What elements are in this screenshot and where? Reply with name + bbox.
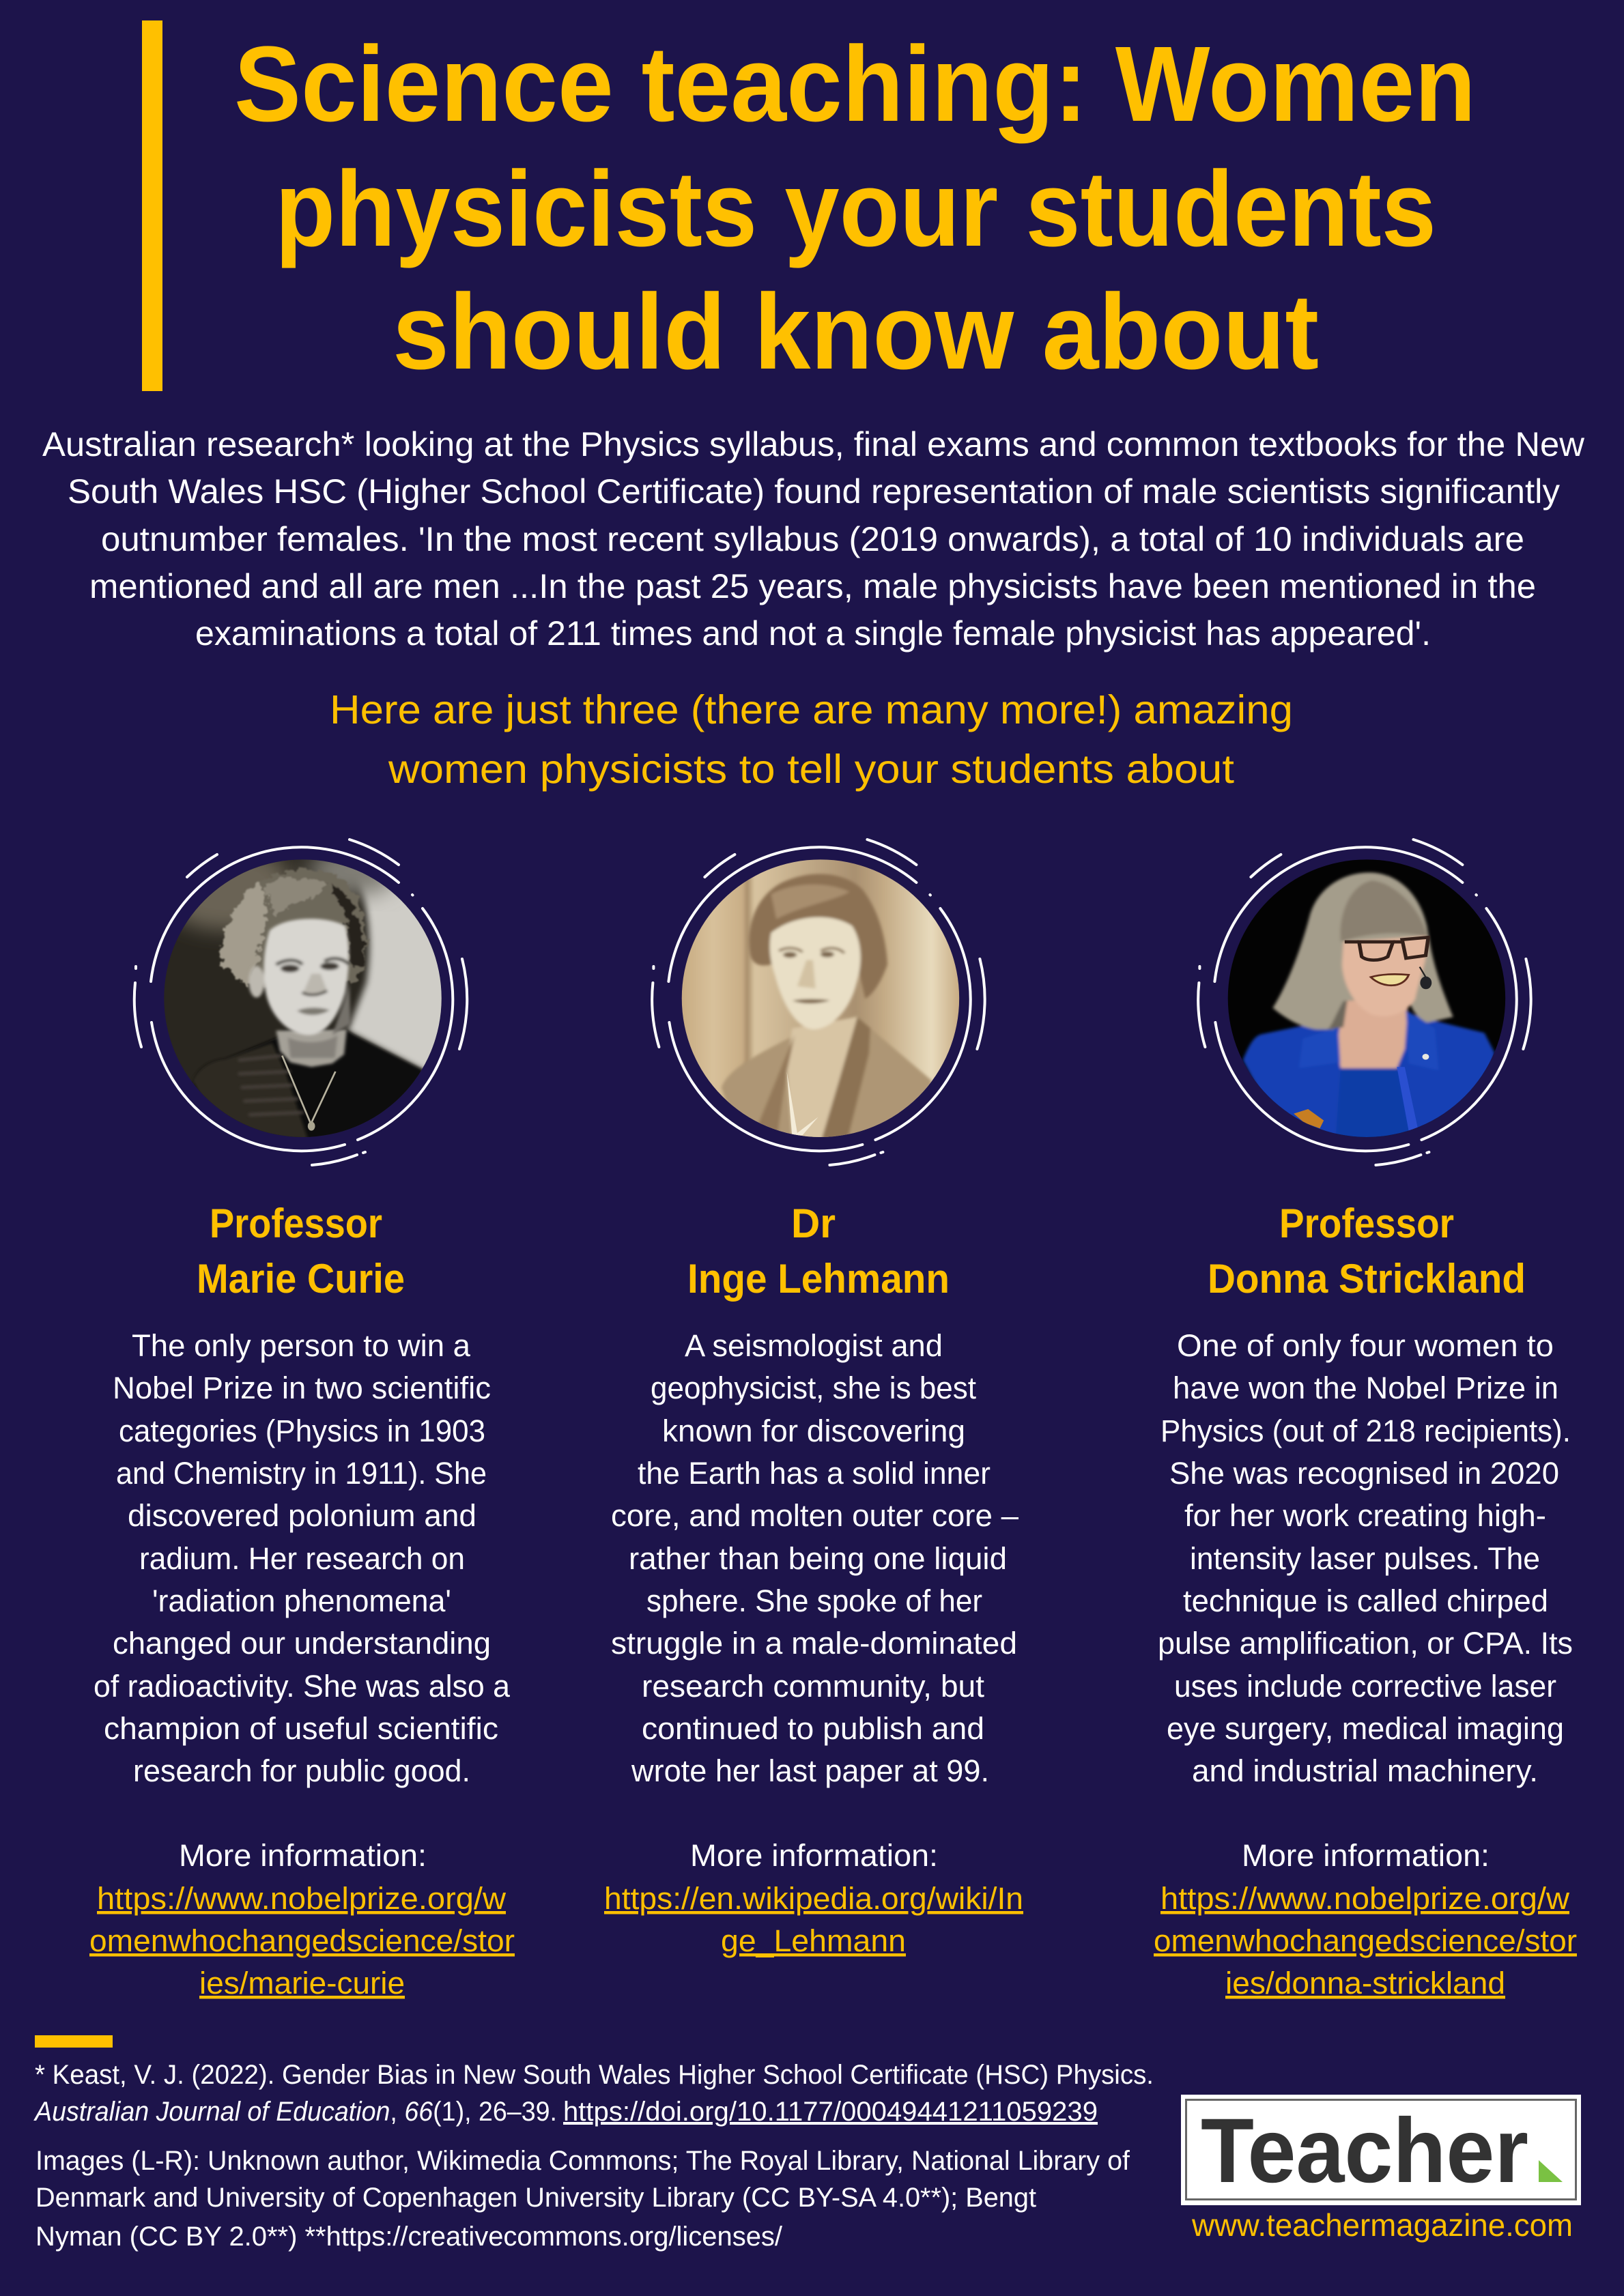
biography: Inge Lehmann: A seismologist and xyxy=(685,1328,943,1363)
intro paragraph xyxy=(42,425,1585,652)
biography: Inge Lehmann: the Earth has a solid inner xyxy=(638,1456,991,1491)
biography: Donna Strickland: eye surgery, medical imaging xyxy=(1167,1711,1564,1746)
biography: Marie Curie: 'radiation phenomena' xyxy=(152,1583,451,1618)
biography: Donna Strickland: for her work creating high- xyxy=(1184,1498,1546,1533)
portrait: Marie Curie xyxy=(134,840,467,1165)
biography: Marie Curie: and Chemistry in 1911). She xyxy=(116,1456,487,1491)
biography: Inge Lehmann: continued to publish and xyxy=(642,1711,984,1746)
panel: Marie Curie xyxy=(89,1201,515,2000)
portrait: Inge Lehmann xyxy=(652,840,985,1165)
intro paragraph: South Wales HSC (Higher School Certificate) found representation of male scientists significantly xyxy=(68,472,1560,511)
intro paragraph: outnumber females. 'In the most recent syllabus (2019 onwards), a total of 10 individuals are xyxy=(101,520,1524,558)
subheading: Here are just three (there are many more!) amazing xyxy=(330,687,1293,732)
subheading: women physicists to tell your students about xyxy=(388,747,1234,792)
biography: Donna Strickland: She was recognised in 2020 xyxy=(1169,1456,1559,1491)
more information: Inge Lehmann: https://en.wikipedia.org/wiki/In xyxy=(604,1881,1023,1916)
name: Inge Lehmann: Inge Lehmann xyxy=(687,1256,950,1302)
biography: Donna Strickland: Physics (out of 218 recipients). xyxy=(1160,1414,1571,1448)
name: Donna Strickland xyxy=(1208,1201,1526,1302)
more information: Donna Strickland xyxy=(1154,1838,1577,2000)
reference citation: * Keast, V. J. (2022). Gender Bias in New South Wales Higher School Certificate (HSC) Physics. xyxy=(35,2060,1154,2090)
intro paragraph: mentioned and all are men ...In the past 25 years, male physicists have been mentioned in the xyxy=(89,567,1536,605)
more information: Marie Curie: https://www.nobelprize.org/w xyxy=(97,1881,507,1916)
portrait: Donna Strickland xyxy=(1198,840,1531,1165)
biography: Marie Curie: research for public good. xyxy=(133,1753,470,1788)
name: Donna Strickland: Donna Strickland xyxy=(1208,1256,1526,1302)
biography: Donna Strickland: pulse amplification, or CPA. Its xyxy=(1158,1626,1573,1661)
image credits xyxy=(35,2146,1130,2252)
biography: Marie Curie: Nobel Prize in two scientific xyxy=(113,1371,491,1405)
title: physicists your students xyxy=(275,149,1436,269)
biography: Marie Curie: discovered polonium and xyxy=(128,1498,476,1533)
biography: Marie Curie: The only person to win a xyxy=(132,1328,471,1363)
more information: Marie Curie xyxy=(89,1838,515,2000)
biography: Inge Lehmann: geophysicist, she is best xyxy=(651,1371,976,1405)
biography: Donna Strickland: have won the Nobel Prize in xyxy=(1173,1371,1558,1405)
biography: Marie Curie: of radioactivity. She was also a xyxy=(94,1669,511,1704)
biography: Donna Strickland: and industrial machinery. xyxy=(1192,1753,1538,1788)
more information: Marie Curie: More information: xyxy=(179,1838,427,1873)
panel: Inge Lehmann xyxy=(604,1201,1023,1958)
name: Inge Lehmann xyxy=(687,1201,950,1302)
biography: Inge Lehmann: sphere. She spoke of her xyxy=(646,1583,982,1618)
name: Marie Curie xyxy=(197,1201,405,1302)
biography: Marie Curie: categories (Physics in 1903 xyxy=(119,1414,485,1448)
title: should know about xyxy=(393,272,1319,392)
logo: Teacher: Teacher xyxy=(1201,2100,1528,2202)
biography: Donna Strickland: One of only four women to xyxy=(1177,1328,1554,1363)
biography: Donna Strickland: technique is called chirped xyxy=(1183,1583,1548,1618)
biography: Marie Curie: changed our understanding xyxy=(113,1626,491,1661)
image credits: Denmark and University of Copenhagen University Library (CC BY-SA 4.0**); Bengt xyxy=(35,2183,1036,2213)
intro paragraph: Australian research* looking at the Physics syllabus, final exams and common textbooks for the New xyxy=(42,425,1585,463)
name: Marie Curie: Marie Curie xyxy=(197,1256,405,1302)
more information: Inge Lehmann: ge_Lehmann xyxy=(721,1923,906,1958)
biography: Marie Curie: radium. Her research on xyxy=(139,1541,465,1576)
reference citation: https://doi.org/10.1177/00049441211059239 xyxy=(563,2097,1098,2127)
more information: Inge Lehmann xyxy=(604,1838,1023,1958)
more information: Donna Strickland: omenwhochangedscience/stor xyxy=(1154,1923,1577,1958)
more information: Donna Strickland: https://www.nobelprize.org/w xyxy=(1160,1881,1570,1916)
biography: Donna Strickland xyxy=(1158,1328,1573,1788)
more information: Marie Curie: ies/marie-curie xyxy=(199,1966,405,2000)
biography: Inge Lehmann: research community, but xyxy=(642,1669,985,1704)
biography: Donna Strickland: intensity laser pulses. The xyxy=(1190,1541,1540,1576)
more information: Marie Curie: omenwhochangedscience/stor xyxy=(89,1923,515,1958)
biography: Inge Lehmann xyxy=(611,1328,1018,1788)
more information: Donna Strickland: More information: xyxy=(1242,1838,1490,1873)
biography: Inge Lehmann: wrote her last paper at 99. xyxy=(631,1753,989,1788)
biography: Donna Strickland: uses include corrective laser xyxy=(1174,1669,1556,1704)
biography: Marie Curie: champion of useful scientific xyxy=(104,1711,498,1746)
title: Science teaching: Women xyxy=(234,25,1476,144)
image credits: Images (L-R): Unknown author, Wikimedia Commons; The Royal Library, National Library of xyxy=(35,2146,1130,2176)
more information: Inge Lehmann: More information: xyxy=(690,1838,938,1873)
name: Donna Strickland: Professor xyxy=(1279,1201,1454,1246)
image credits: Nyman (CC BY 2.0**) **https://creativecommons.org/licenses/ xyxy=(35,2222,783,2252)
website URL: www.teachermagazine.com xyxy=(1191,2207,1573,2243)
biography: Marie Curie xyxy=(94,1328,511,1788)
title xyxy=(234,25,1476,392)
biography: Inge Lehmann: core, and molten outer core – xyxy=(611,1498,1018,1533)
footnote accent bar xyxy=(35,2035,113,2048)
name: Inge Lehmann: Dr xyxy=(791,1201,836,1246)
title accent bar xyxy=(142,20,162,391)
more information: Donna Strickland: ies/donna-strickland xyxy=(1225,1966,1505,2000)
biography: Inge Lehmann: struggle in a male-dominated xyxy=(611,1626,1017,1661)
name: Marie Curie: Professor xyxy=(210,1201,382,1246)
panel: Donna Strickland xyxy=(1154,1201,1577,2000)
subheading xyxy=(330,687,1293,792)
reference citation: Australian Journal of Education, 66(1), 26–39. xyxy=(33,2097,557,2127)
biography: Inge Lehmann: known for discovering xyxy=(662,1414,965,1448)
reference citation xyxy=(33,2060,1154,2127)
intro paragraph: examinations a total of 211 times and not a single female physicist has appeared'. xyxy=(195,614,1431,652)
biography: Inge Lehmann: rather than being one liquid xyxy=(629,1541,1007,1576)
